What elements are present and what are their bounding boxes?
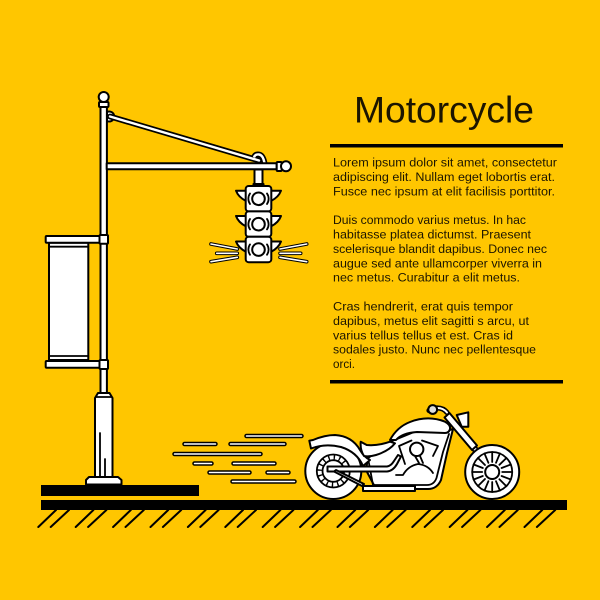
mount stem [254, 170, 264, 186]
pole finial [99, 92, 109, 107]
seat [361, 442, 395, 456]
street lamp pole with arms [86, 92, 291, 484]
footboard [363, 486, 415, 491]
text block: paragraph 3: Cras hendrerit, erat quis tempor [333, 300, 513, 314]
text block: paragraph 2: augue sed ante ullamcorper viverra in [333, 256, 542, 270]
rear wheel [305, 443, 361, 499]
signal head: middle [236, 211, 281, 237]
text block: paragraph 1: Fusce nec ipsum at elit facilisis porttitor. [333, 184, 555, 198]
pole base [86, 393, 122, 484]
signal head: bottom [236, 237, 281, 262]
text block: paragraph 2: scelerisque blandit dapibus. Donec nec [333, 242, 547, 256]
text block: paragraph 3 [333, 300, 536, 371]
title: Motorcycle [354, 90, 534, 130]
text block: paragraph 1: adipiscing elit. Nullam eget lobortis erat. [333, 170, 555, 184]
platform [41, 485, 199, 496]
speed lines [173, 434, 303, 483]
bottom rule [330, 380, 563, 384]
text block: paragraph 3: sodales justo. Nunc nec pellentesque [333, 343, 536, 357]
frame and engine silhouette [366, 429, 453, 489]
pole shaft [100, 105, 107, 393]
fuel tank [390, 418, 450, 440]
text block: paragraph 1: Lorem ipsum dolor sit amet, consectetur [333, 156, 557, 170]
text block: paragraph 2 [333, 213, 547, 285]
top rule [330, 144, 563, 148]
traffic light [211, 170, 307, 262]
light rays [211, 244, 307, 262]
front wheel [465, 445, 519, 499]
banner [46, 235, 108, 369]
rear fender [309, 435, 370, 466]
text block: paragraph 2: Duis commodo varius metus. In hac [333, 213, 526, 227]
exhaust pipes and swingarm [328, 455, 401, 486]
text block: paragraph 3: varius tellus tellus et est. Cras id [333, 328, 513, 342]
motorcycle [305, 405, 519, 499]
text block: paragraph 2: nec metus. Curabitur a elit metus. [333, 271, 520, 285]
front fork and handlebar [428, 405, 493, 472]
horizontal arm [107, 161, 291, 171]
text block: paragraph 2: habitasse platea dictumst. Praesent [333, 228, 532, 242]
text block: paragraph 3: dapibus, metus elit sagitti s arcu, ut [333, 314, 530, 328]
diagonal brace [107, 112, 264, 163]
signal head: top [236, 186, 281, 211]
text block: paragraph 1 [333, 156, 557, 198]
ground with hatching [38, 500, 567, 527]
text block: paragraph 3: orci. [333, 357, 355, 371]
